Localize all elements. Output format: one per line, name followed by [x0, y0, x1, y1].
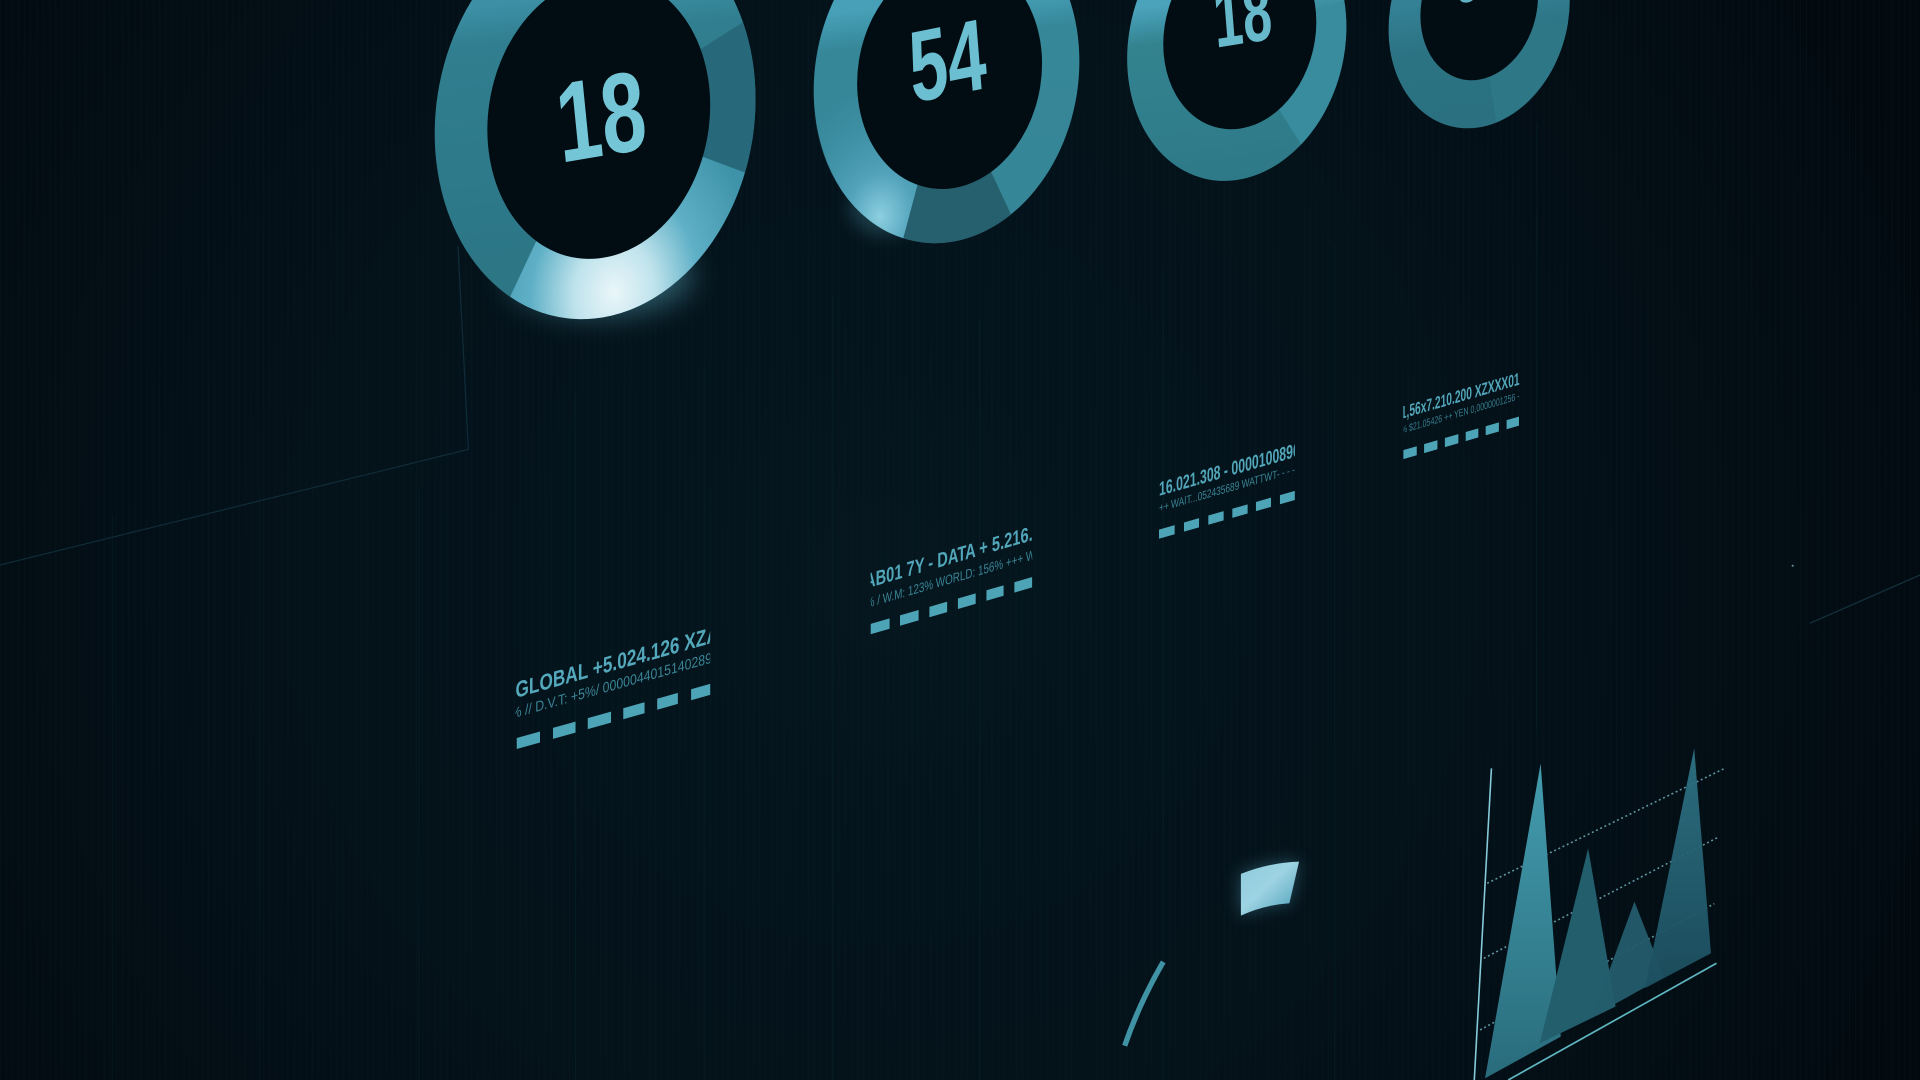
chart area: peak three	[1592, 902, 1664, 1017]
chart area: peak one	[1485, 763, 1561, 1078]
chart baseline	[1508, 963, 1716, 1080]
data block: GLOBAL	[516, 629, 710, 749]
data block: 16.021.308: ++ WAIT...052435689 WATTWT- - - -	[1159, 462, 1295, 515]
data block: GLOBAL: % // D.V.T: +5%/ 00000440151402896	[511, 648, 719, 723]
chart axis	[1474, 768, 1491, 1080]
donut: 18 large	[435, 0, 756, 336]
highlighted gauge segment	[1240, 861, 1299, 916]
donut: 18 medium	[1127, 0, 1346, 196]
data block: AB01 7Y: % / W.M: 123% WORLD: 156% +++ WW	[866, 545, 1045, 611]
data block: 1,56x7.210.200	[1401, 369, 1520, 460]
gauge arc segment	[1125, 962, 1163, 1046]
chart area: peak four	[1645, 748, 1711, 988]
data block: 1,56x7.210.200: 1,56x7.210.200 XZXXX01	[1401, 369, 1520, 423]
data block: 1,56x7.210.200: % $21.05426 ++ YEN 0,0000001256 -	[1401, 390, 1520, 437]
data block: AB01 7Y: TAB01 7Y - DATA + 5.216.0	[857, 519, 1041, 596]
frame line: left panel outline	[0, 246, 468, 565]
data block: 16.021.308: 16.021.308 - 0000100896	[1159, 439, 1300, 501]
donut: 54	[814, 0, 1079, 257]
donut: small, cropped	[1389, 0, 1570, 142]
chart gridlines	[1480, 768, 1725, 1030]
area chart	[1474, 748, 1725, 1080]
frame line: right panel fragment	[1792, 565, 1920, 623]
data block: AB01 7Y	[870, 528, 1032, 634]
data block: 16.021.308	[1159, 439, 1300, 539]
donut value: 18	[551, 47, 651, 188]
chart area: peak two	[1540, 848, 1616, 1043]
data block: GLOBAL: GLOBAL +5.024.126 XZA	[516, 620, 719, 703]
